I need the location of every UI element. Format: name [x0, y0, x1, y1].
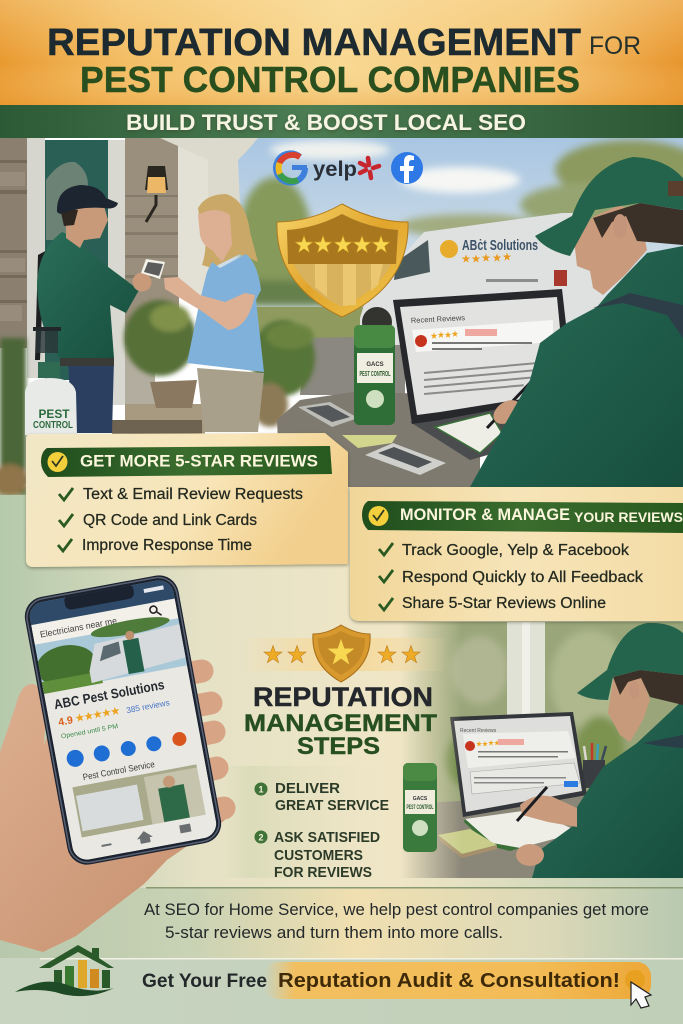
technician face — [66, 206, 108, 248]
reply box — [470, 763, 580, 794]
review count: 385 reviews — [125, 697, 170, 715]
hand holding phone — [0, 671, 225, 952]
list item: response time: Improve Response Time — [82, 537, 252, 554]
list item: text and email: Text & Email Review Requests — [83, 486, 303, 503]
lower technician hair — [613, 670, 683, 705]
fingers — [180, 671, 224, 812]
notch — [63, 583, 135, 611]
rating number: 4.9 — [57, 714, 74, 729]
icon: company house logo — [15, 945, 114, 996]
foreground cap — [535, 157, 683, 256]
steps heading block — [240, 625, 450, 760]
foreground shirt — [470, 246, 683, 487]
foreground strap — [593, 293, 683, 338]
pest control can: PEST CONTROL — [406, 805, 434, 811]
technician trousers — [68, 360, 114, 433]
customer face — [198, 210, 232, 262]
list item: share reviews: Share 5-Star Reviews Online — [402, 595, 606, 612]
status icons — [143, 585, 164, 593]
customer hair — [198, 194, 258, 268]
laptop heading: Recent Reviews — [460, 728, 497, 734]
technician shirt — [37, 232, 139, 358]
foreground hair — [593, 203, 683, 245]
customer arm — [164, 277, 255, 330]
step two line three: FOR REVIEWS — [274, 864, 372, 881]
call to action row — [15, 945, 683, 1008]
pen holder — [583, 743, 606, 788]
house facade — [0, 138, 258, 434]
step two — [254, 829, 380, 881]
reply text lines — [424, 362, 544, 395]
pest control can on table: GACS — [366, 362, 384, 368]
rating stars — [75, 706, 120, 722]
van logo stars — [462, 252, 511, 263]
step two line one: ASK SATISFIED — [274, 829, 380, 846]
icon: facebook — [391, 152, 423, 184]
pest control can: GACS — [413, 796, 428, 802]
van logo bulb — [440, 240, 458, 258]
fade into cream background — [400, 622, 462, 878]
steps backing panel — [222, 766, 402, 878]
search bar — [31, 599, 178, 645]
technician with laptop foreground — [470, 157, 683, 487]
small calculator — [298, 402, 358, 427]
clipboard — [465, 810, 580, 848]
list item: qr code: QR Code and Link Cards — [83, 512, 257, 529]
lower technician face — [608, 670, 650, 742]
lower technician ear — [629, 681, 639, 699]
pest control can on table: PEST CONTROL — [360, 371, 391, 378]
lower technician shirt — [532, 700, 683, 878]
listing photo — [31, 611, 187, 695]
wall lantern — [145, 166, 168, 222]
lower technician — [516, 623, 683, 878]
small stars row — [264, 646, 420, 663]
backpack strap — [35, 251, 46, 360]
large calculator — [365, 443, 446, 475]
laptop — [450, 712, 587, 851]
panel two content — [362, 501, 683, 612]
writing hand — [520, 796, 577, 827]
business name: ABC Pest Solutions — [53, 677, 166, 712]
panel one heading bar — [41, 446, 332, 477]
phone screen — [24, 576, 219, 863]
step one — [254, 780, 389, 814]
hero photo scene — [0, 138, 683, 496]
review card — [412, 320, 553, 352]
review platform logos — [276, 152, 423, 184]
palm and thumb — [0, 684, 225, 952]
lower photo scene — [400, 622, 683, 878]
list item: track platforms: Track Google, Yelp & Facebook — [402, 542, 629, 559]
review card — [463, 731, 576, 768]
white service van — [360, 213, 604, 345]
foreground ear — [613, 214, 627, 238]
icon: yelp burst — [360, 158, 379, 178]
panel two heading small text: YOUR REVIEWS — [574, 510, 683, 525]
subtitle band: BUILD TRUST & BOOST LOCAL SEO — [126, 110, 526, 135]
customer trousers — [197, 368, 264, 432]
icon: small shield — [313, 625, 370, 682]
table, calculators and notes — [277, 392, 480, 487]
subtitle band — [0, 105, 683, 138]
title line two: PEST CONTROL COMPANIES — [80, 59, 580, 100]
lower page background — [0, 487, 683, 1024]
foreground face — [573, 205, 647, 295]
planter and shrubs — [0, 300, 315, 496]
icon: yellow check badge — [368, 506, 388, 526]
panel two heading bar — [362, 501, 683, 533]
service photo — [72, 764, 206, 837]
heading: management: MANAGEMENT — [244, 710, 437, 737]
heading: steps: STEPS — [297, 733, 380, 760]
description line two: 5-star reviews and turn them into more calls. — [165, 924, 503, 942]
window background — [400, 622, 683, 802]
pest control tank: PEST — [38, 407, 70, 421]
desk surface — [400, 790, 683, 878]
description text — [144, 887, 683, 942]
search text: Electricians near me — [39, 616, 118, 640]
sky and background landscape — [200, 138, 683, 395]
five-star gold shield — [277, 204, 408, 317]
pest control tank: CONTROL — [33, 419, 73, 431]
panel one heading text: GET MORE 5-STAR REVIEWS — [80, 452, 318, 470]
pest control can on table — [354, 325, 395, 425]
step one number: 1 — [258, 784, 264, 794]
customer shirt — [187, 254, 264, 372]
pest control can — [403, 763, 437, 852]
technician presenting QR card — [35, 185, 152, 433]
nav icons — [100, 823, 192, 851]
step one line one: DELIVER — [275, 780, 340, 797]
icon: mouse cursor — [631, 982, 651, 1008]
sticky note pad — [438, 829, 497, 858]
title word for: FOR — [589, 32, 641, 60]
clipboard and pen — [435, 413, 502, 453]
lower technician cap — [577, 623, 683, 700]
cta button: Reputation Audit & Consultation! — [278, 970, 620, 992]
header banner — [0, 0, 683, 105]
cta button — [264, 962, 651, 999]
smartphone — [22, 572, 224, 868]
heading: reputation: REPUTATION — [253, 682, 433, 712]
title line one: REPUTATION MANAGEMENT — [47, 22, 581, 64]
step two line two: CUSTOMERS — [274, 847, 363, 864]
customer woman — [164, 194, 264, 432]
icon: google — [276, 153, 307, 182]
cta lead text: Get Your Free — [142, 971, 267, 992]
open status: Opened until 5 PM — [60, 723, 119, 741]
action buttons — [65, 729, 188, 768]
icon: magnifier — [149, 605, 162, 617]
sticky notes — [342, 435, 397, 448]
panel: monitor and manage reviews — [350, 487, 683, 621]
phone body — [22, 572, 224, 868]
laptop with recent reviews screen — [393, 289, 574, 460]
technician hand — [132, 272, 152, 292]
yelp wordmark: yelp — [313, 158, 357, 181]
technician cap — [57, 185, 118, 214]
panel two heading text: MONITOR & MANAGE — [400, 506, 570, 524]
description line one: At SEO for Home Service, we help pest control companies get more — [144, 901, 649, 919]
pen — [517, 787, 547, 821]
icon: yellow check badge — [48, 452, 68, 472]
QR code card — [141, 259, 165, 279]
service label: Pest Control Service — [82, 759, 155, 782]
step two number: 2 — [258, 832, 264, 842]
van logo name: ABċt Solutions — [462, 237, 538, 254]
list item: respond quickly: Respond Quickly to All Feedback — [402, 569, 643, 586]
laptop heading: Recent Reviews — [411, 313, 465, 325]
panel: get more 5-star reviews — [26, 433, 348, 567]
pest control tank — [25, 327, 77, 435]
step one line two: GREAT SERVICE — [275, 797, 389, 814]
panel one content — [41, 446, 332, 554]
